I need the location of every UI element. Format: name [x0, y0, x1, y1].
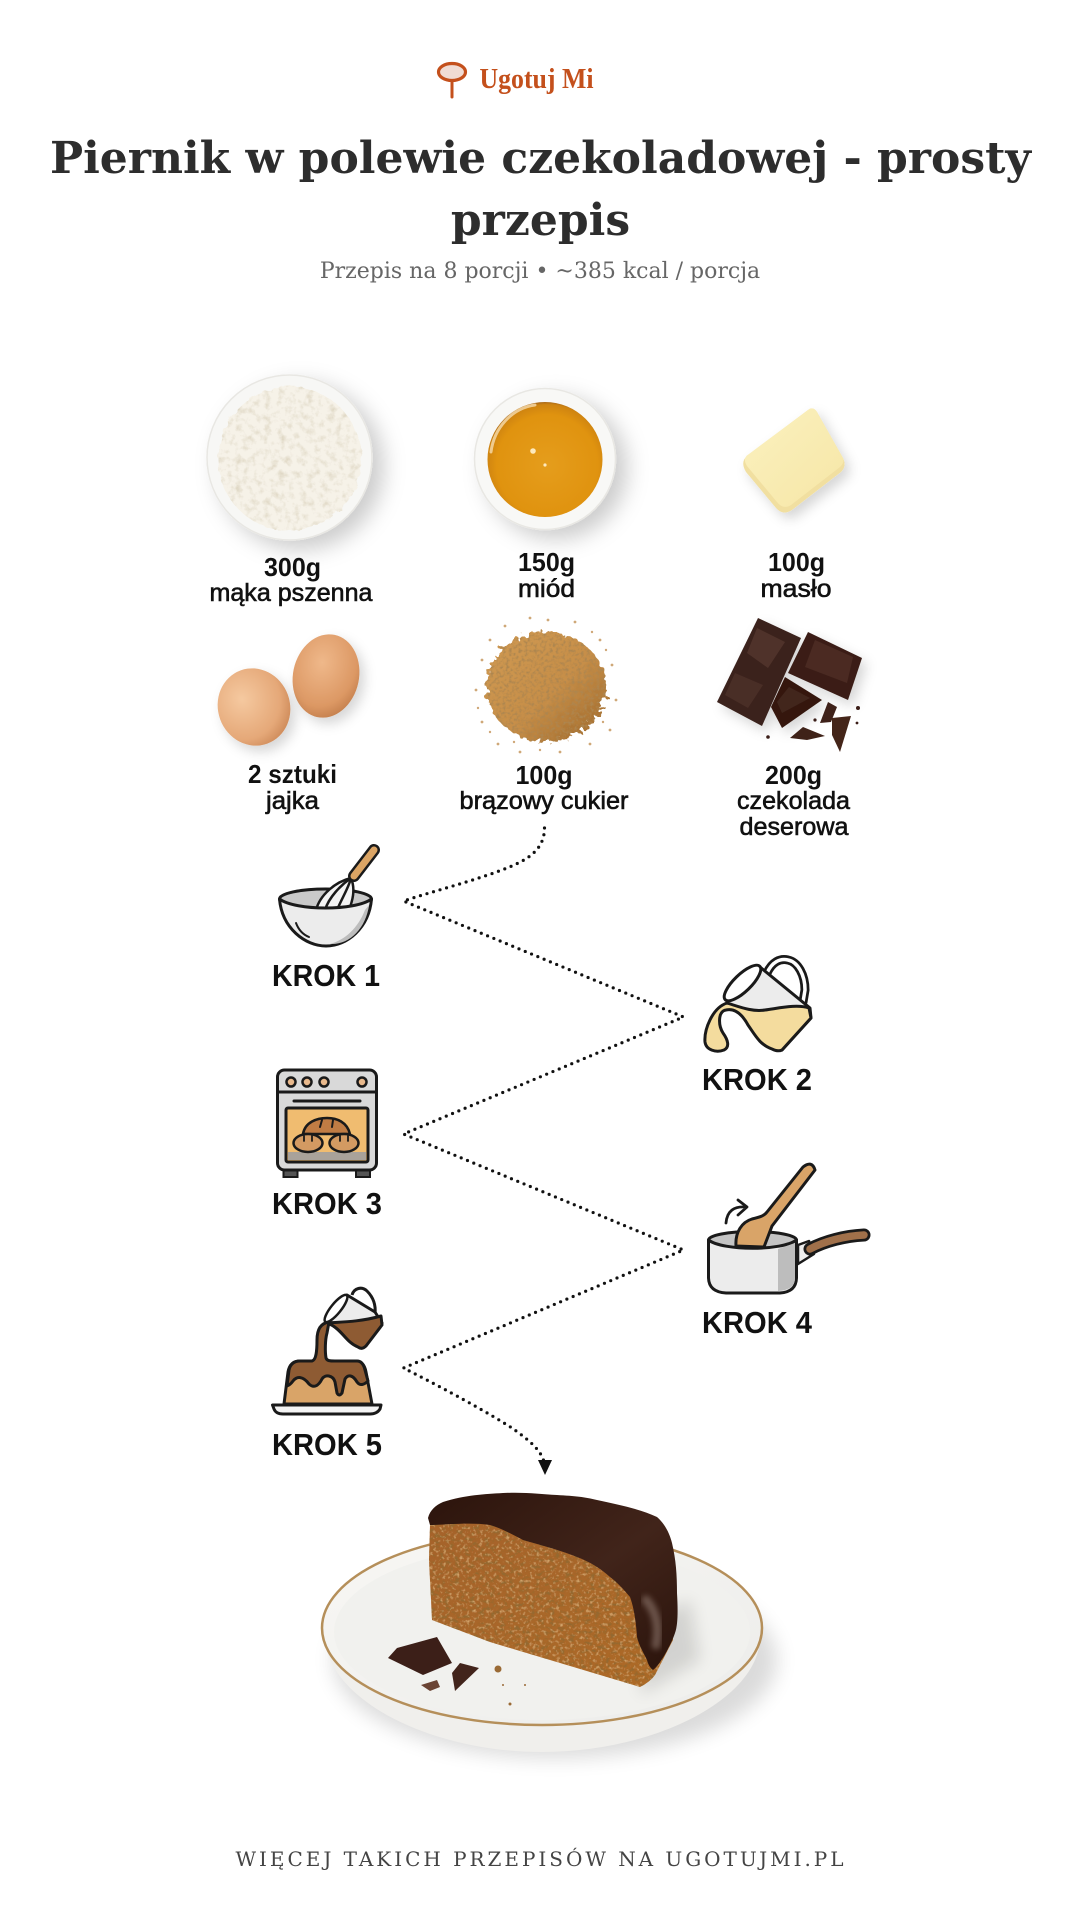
label: eggs: jajka [265, 787, 319, 815]
label: sugar: brązowy cukier [460, 787, 628, 815]
ingredient: dark chocolate [717, 618, 862, 752]
icon: logo spoon [438, 64, 466, 97]
icon: glazing cake [272, 1288, 382, 1414]
arrow head [538, 1460, 552, 1475]
label: honey: 150g [518, 547, 575, 577]
icon: pouring jug [705, 960, 811, 1051]
label: chocolate: deserowa [740, 813, 849, 841]
step 1 [272, 850, 380, 993]
dotted zig-zag path [404, 828, 684, 1462]
ingredient: butter [743, 408, 845, 513]
label: KROK 3: KROK 3 [272, 1186, 382, 1221]
final dish: gingerbread slice on plate [322, 1493, 777, 1758]
subtitle: Przepis na 8 porcji • ~385 kcal / porcja [320, 259, 760, 284]
plate [322, 1531, 762, 1752]
label: KROK 4: KROK 4 [702, 1305, 813, 1340]
label: chocolate: 200g [765, 760, 822, 790]
label: flour [210, 552, 373, 607]
step 3 [272, 1070, 382, 1221]
icon: bowl and whisk [280, 850, 374, 946]
label: flour: 300g [264, 552, 321, 582]
slice shadow on plate [640, 1600, 700, 1695]
title: przepis [451, 195, 630, 246]
icon: oven [278, 1070, 376, 1177]
label: butter: 100g [768, 547, 825, 577]
ingredient: brown sugar [475, 617, 617, 753]
label: butter: masło [760, 575, 832, 603]
label: chocolate [737, 760, 850, 841]
label: sugar: 100g [516, 760, 572, 790]
ingredient: honey bowl [474, 388, 616, 530]
plate shadow [333, 1562, 777, 1758]
label: chocolate: czekolada [737, 787, 850, 815]
cake slice [428, 1493, 678, 1687]
step 4 [702, 1164, 864, 1340]
label: honey [518, 547, 575, 603]
label: KROK 1: KROK 1 [272, 958, 380, 993]
logo wordmark: Ugotuj Mi [480, 64, 594, 95]
label: KROK 5: KROK 5 [272, 1427, 382, 1462]
panel: ingredients [207, 375, 862, 841]
title: Piernik w polewie czekoladowej - prosty [50, 133, 1032, 184]
step 2 [702, 960, 812, 1097]
step 5 [272, 1288, 382, 1462]
label: eggs [248, 759, 337, 815]
label: butter [760, 547, 832, 603]
label: KROK 2: KROK 2 [702, 1062, 812, 1097]
ingredient: flour bowl [207, 375, 372, 540]
logo: Ugotuj Mi [438, 64, 594, 97]
chocolate pieces [388, 1637, 526, 1706]
label: eggs: 2 sztuki [248, 759, 337, 789]
ingredient: eggs [207, 628, 367, 756]
label: flour: mąka pszenna [210, 579, 373, 607]
title [50, 133, 1032, 246]
label: sugar [460, 760, 628, 815]
icon: saucepan with wooden spoon [708, 1164, 864, 1293]
label: honey: miód [518, 575, 575, 603]
footer: WIĘCEJ TAKICH PRZEPISÓW NA UGOTUJMI.PL [236, 1846, 844, 1871]
